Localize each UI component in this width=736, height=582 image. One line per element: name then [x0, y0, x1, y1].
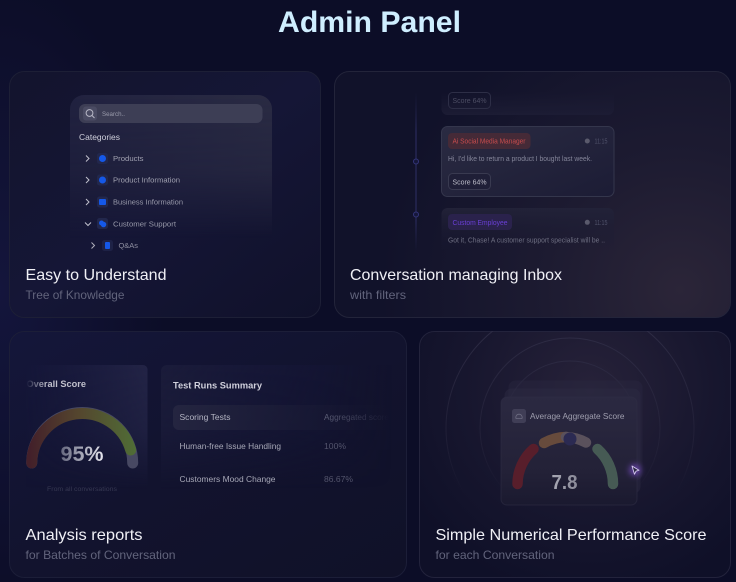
tree of knowledge window: [70, 95, 272, 251]
tag: ai social media manager: [448, 133, 530, 149]
table row: issue handling: Human-free Issue Handling: [180, 441, 281, 451]
message card: selected: [442, 126, 614, 196]
search bar: Search..: [102, 111, 125, 118]
tag: custom employee: Custom Employee: [452, 218, 508, 227]
gauge: segmented arc: [518, 437, 613, 484]
timestamp: 11:15: [594, 138, 608, 146]
card subheading: Tree of Knowledge: [26, 288, 125, 302]
message text: Got it, Chase! A customer support specialist will be ..: [448, 236, 605, 244]
score card: [501, 397, 637, 505]
tree row: customer support: Customer Support: [113, 220, 177, 228]
card heading: Easy to Understand: [26, 267, 166, 284]
tree row: q and a: Q&As: [118, 241, 138, 250]
tree row: business information: Business Information: [113, 198, 183, 206]
card subheading: for Batches of Conversation: [26, 548, 176, 562]
icon: speedometer: [512, 409, 526, 423]
score card label: Average Aggregate Score: [530, 411, 625, 421]
gauge knob: [564, 432, 576, 446]
panel: conversation inbox: [334, 72, 730, 318]
message card: custom employee: [442, 208, 614, 250]
score value: 7.8: [552, 472, 578, 494]
tree row: business information: [86, 196, 183, 208]
card heading: Analysis reports: [26, 527, 142, 544]
panel: easy to understand: [10, 72, 320, 318]
card subheading: with filters: [349, 288, 406, 302]
tree row: product information: [86, 174, 180, 186]
timestamp: [585, 220, 608, 227]
overall score label: Overall Score: [26, 379, 86, 389]
table title: Test Runs Summary: [173, 380, 262, 390]
gauge: 95%: 95%: [60, 443, 104, 466]
timestamp: 11:15: [594, 220, 608, 227]
overall score panel: [26, 365, 148, 495]
test runs summary table: [162, 369, 381, 484]
tree row: q and a: [92, 240, 138, 251]
concentric rings: [446, 331, 694, 454]
panel: analysis reports: [10, 332, 406, 578]
score badge: [448, 174, 490, 190]
tag: ai social media manager: Ai Social Media Manager: [452, 136, 526, 146]
gauge caption: From all conversations: [47, 486, 118, 493]
categories heading: Categories: [79, 132, 120, 142]
timeline: [414, 92, 418, 252]
stacked back cards: [504, 380, 642, 494]
score badge: Score 64%: [452, 178, 487, 186]
table header row: Scoring Tests: [180, 412, 230, 422]
tag: custom employee: [448, 214, 512, 230]
icon: cursor: [629, 464, 641, 476]
search bar: [79, 104, 262, 123]
panel: numerical performance score: [420, 304, 730, 578]
tree row: product information: Product Information: [113, 176, 180, 184]
table row: mood change: Customers Mood Change: [180, 474, 276, 484]
message card: faded top: Score 64%: [452, 96, 487, 105]
table header row: [173, 405, 390, 430]
tree row: customer support: [85, 218, 177, 229]
table row: issue handling: 100%: [324, 441, 346, 451]
table header row: Aggregated score: [324, 412, 389, 422]
table row: issue handling: [180, 441, 346, 451]
card heading: Simple Numerical Performance Score: [436, 527, 707, 544]
message text: Hi, I'd like to return a product I bought last week.: [448, 154, 592, 163]
card subheading: for each Conversation: [436, 548, 554, 562]
tree row: products: Products: [113, 154, 144, 163]
tree row: products: [86, 153, 144, 164]
card heading: Conversation managing Inbox: [350, 267, 562, 284]
title: Admin Panel: [278, 6, 461, 39]
timestamp: [585, 138, 608, 146]
table row: mood change: 86.67%: [324, 474, 353, 484]
message card: faded top: [442, 92, 614, 115]
table row: mood change: [180, 474, 353, 484]
